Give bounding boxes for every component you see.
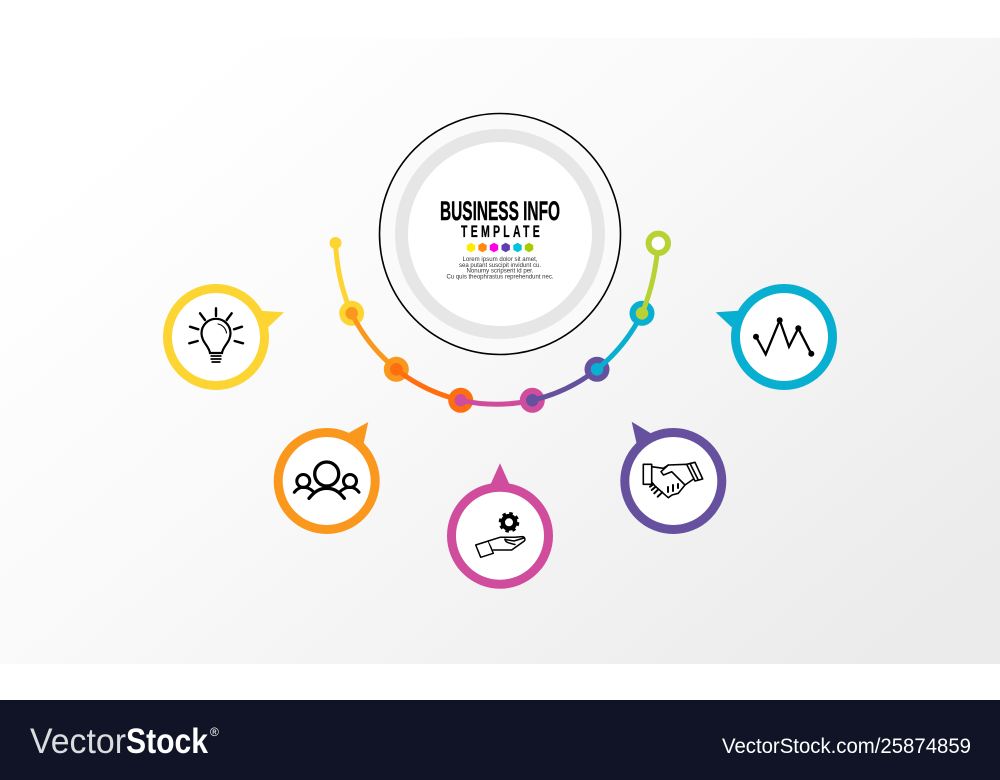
badge: teal line chart (716, 288, 832, 386)
segment: lime (642, 243, 658, 313)
badge: yellow lightbulb (168, 288, 284, 386)
footer bar (0, 700, 1000, 780)
footer image id: VectorStock.com/25874859 (722, 735, 971, 758)
footer logo: Vector: Vector (30, 722, 126, 761)
icon: gear (500, 513, 518, 531)
node 5 dot (591, 363, 603, 376)
timeline arc (330, 234, 668, 413)
footer logo: Stock: Stock (126, 722, 208, 761)
badge: orange people (278, 422, 375, 530)
node 5 (584, 357, 610, 382)
node 2 (384, 357, 409, 382)
icon: handshake (643, 462, 703, 498)
node 3 (448, 388, 473, 413)
body text: Nonumy scripserit id per. (466, 268, 534, 275)
segment: purple (532, 369, 597, 400)
node 1 (339, 301, 364, 326)
node: start yellow (330, 237, 342, 249)
registered mark: ® (210, 725, 219, 739)
subheading: TEMPLATE (461, 221, 540, 241)
badge: purple handshake (625, 422, 722, 530)
icon: group of people (294, 462, 359, 498)
node 6 (630, 301, 654, 326)
node 3 dot (454, 394, 467, 407)
body text (446, 256, 554, 281)
body text: Cu quis theophrastus reprehendunt nec. (446, 274, 554, 281)
segment: deep orange (396, 369, 461, 400)
badge: pink hand and gear (452, 463, 548, 584)
heading: BUSINESS INFO (440, 196, 560, 226)
icon: hand (476, 537, 525, 557)
node 2 dot (390, 363, 403, 376)
segment: orange (352, 313, 396, 369)
body text: sea putant suscipit invidunt cu. (459, 262, 541, 269)
node 6 dot (636, 307, 648, 320)
segment: pink (461, 400, 532, 404)
icon: zigzag chart (753, 317, 814, 357)
central title circle (380, 114, 620, 354)
colour hexagon row (467, 243, 533, 252)
segment: yellow (336, 243, 352, 313)
node 1 dot (345, 307, 358, 320)
end ring (649, 234, 668, 253)
node 4 dot (526, 394, 539, 407)
icon: lightbulb (189, 308, 243, 362)
node 4 (520, 388, 545, 413)
segment: teal (597, 313, 642, 369)
body text: Lorem ipsum dolor sit amet, (462, 256, 538, 263)
